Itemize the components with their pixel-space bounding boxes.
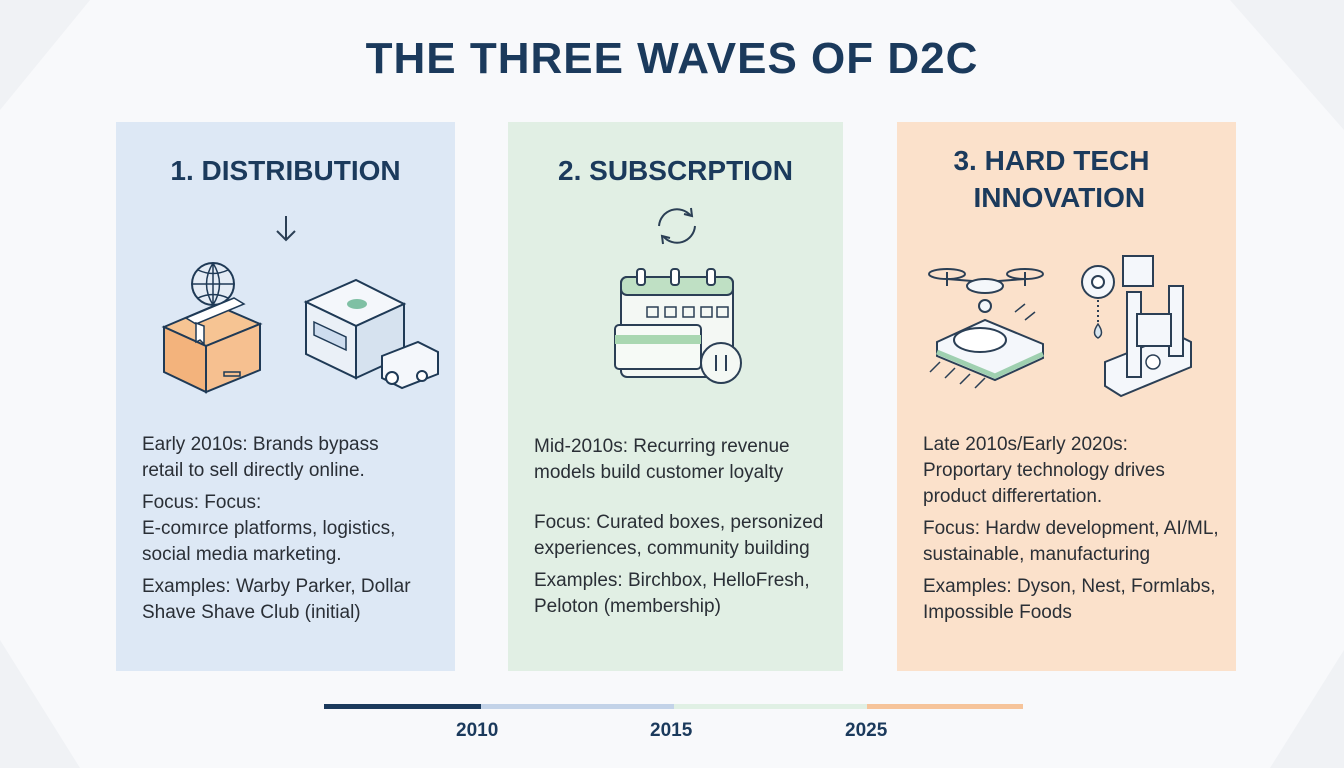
text: hard tech: Impossible Foods <box>923 602 1072 623</box>
icon: drone, device, printer <box>928 255 1192 398</box>
text: distribution: Examples: Warby Parker, Dollar <box>142 576 411 597</box>
text: hard tech: Proportary technology drives <box>923 460 1165 481</box>
title: THE THREE WAVES OF D2C <box>366 34 978 83</box>
text: distribution: E-comırce platforms, logistics, <box>142 518 395 539</box>
text: subscription: models build customer loyalty <box>534 462 783 483</box>
icon: box and warehouse <box>162 262 439 394</box>
heading: subscription: 2. SUBSCRPTION <box>558 155 793 186</box>
text: subscription: Examples: Birchbox, HelloFresh, <box>534 570 810 591</box>
text: subscription: Mid-2010s: Recurring revenue <box>534 436 790 457</box>
text: subscription: Peloton (membership) <box>534 596 721 617</box>
text: hard tech: Focus: Hardw development, AI/ML, <box>923 518 1219 539</box>
timeline label 2010: 2010 <box>456 720 498 741</box>
text: subscription <box>534 436 823 617</box>
heading: hard tech: 3. HARD TECH <box>953 145 1150 176</box>
icon: calendar and card <box>614 268 742 384</box>
timeline bar <box>324 704 1023 709</box>
heading: hard tech: INNOVATION <box>973 182 1145 213</box>
text: subscription: Focus: Curated boxes, personized <box>534 512 823 533</box>
timeline label 2015: 2015 <box>650 720 692 741</box>
text: subscription: experiences, community building <box>534 538 810 559</box>
panel: hard tech <box>897 122 1236 671</box>
icon: down arrow <box>276 216 296 242</box>
heading: distribution: 1. DISTRIBUTION <box>170 155 401 186</box>
text: hard tech: Late 2010s/Early 2020s: <box>923 434 1128 455</box>
text: hard tech: product differertation. <box>923 486 1102 507</box>
text: distribution <box>142 434 411 623</box>
text: distribution: social media marketing. <box>142 544 342 565</box>
timeline label 2025: 2025 <box>845 720 887 741</box>
text: distribution: Shave Shave Club (initial) <box>142 602 361 623</box>
text: hard tech <box>923 434 1219 623</box>
panel: distribution <box>116 122 455 671</box>
panel: subscription <box>508 122 843 671</box>
heading: hard tech <box>953 145 1150 213</box>
text: hard tech: sustainable, manufacturing <box>923 544 1150 565</box>
text: distribution: Focus: Focus: <box>142 492 261 513</box>
icon: cycle arrows <box>658 208 696 244</box>
text: distribution: retail to sell directly online. <box>142 460 365 481</box>
text: hard tech: Examples: Dyson, Nest, Formlabs, <box>923 576 1215 597</box>
text: distribution: Early 2010s: Brands bypass <box>142 434 379 455</box>
